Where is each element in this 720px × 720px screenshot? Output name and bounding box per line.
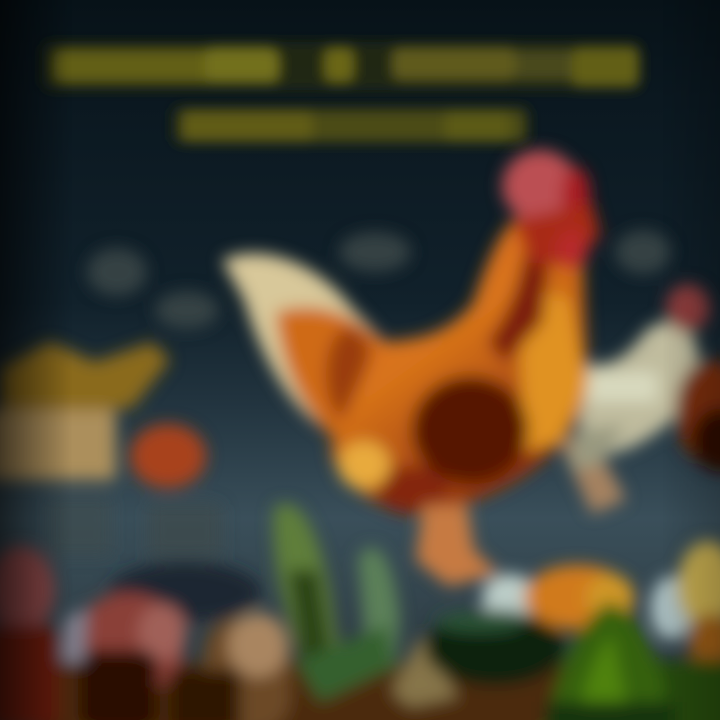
egg and orange [482,565,634,629]
potato [170,613,290,720]
comb [502,150,578,222]
neck dark [488,238,552,362]
subtitle: blurred second line [172,106,530,144]
right brown item [676,360,720,464]
tomato [130,424,206,488]
left bread basket [0,342,206,488]
yellow thigh [338,441,390,489]
leg [416,505,500,586]
small white hen [558,284,710,514]
title: blurred first line [42,42,642,90]
body [331,212,588,514]
main chicken [222,150,600,586]
foreground counter [40,664,600,720]
scene [0,150,720,720]
green leaves [540,602,720,720]
chest yellow [520,288,588,452]
faint background labels [48,230,671,557]
dark zucchini [425,610,565,686]
wattle [556,230,588,270]
green cucumbers [273,504,458,707]
dark table shadow [109,562,261,622]
left red vegetables [0,546,186,720]
tail [222,253,388,436]
dark wing [412,376,528,484]
right lemon and egg [650,541,720,666]
head [513,203,600,268]
